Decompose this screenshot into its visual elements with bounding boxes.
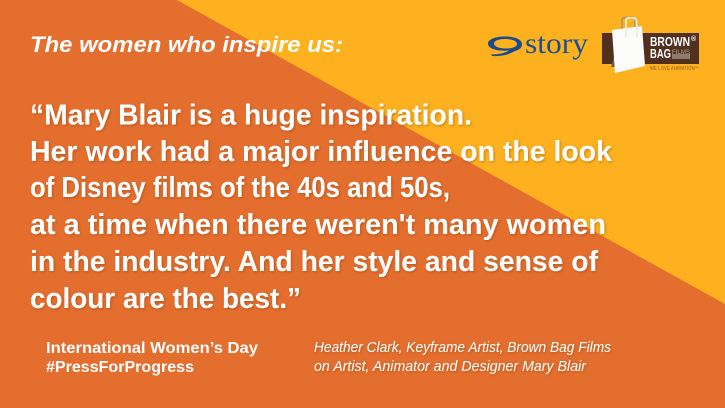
logo: Brown Bag Films: [602, 18, 699, 73]
brown band: [602, 33, 699, 64]
registered mark: ®: [691, 35, 697, 43]
brand text: BROWN: [650, 34, 690, 49]
rear handle: [622, 18, 635, 30]
icon: stylised 9: [488, 36, 522, 56]
quote: colour are the best.”: [30, 283, 301, 315]
quote: “Mary Blair is a huge inspiration.: [30, 100, 472, 132]
tagline: WE LOVE ANIMATION™: [650, 66, 699, 72]
wordmark: story: [525, 27, 588, 60]
footer: attribution: on Artist, Animator and Designer Mary Blair: [314, 359, 587, 375]
quote: [30, 100, 612, 315]
front handle: [626, 18, 637, 37]
footer: campaign: #PressForProgress: [46, 359, 194, 376]
background: yellow diagonal panel: [177, 0, 725, 304]
quote: of Disney films of the 40s and 50s,: [30, 172, 450, 204]
footer: attribution: Heather Clark, Keyframe Artist, Brown Bag Films: [314, 340, 611, 356]
footer: attribution: [314, 340, 611, 375]
footer: campaign: [46, 340, 258, 376]
quote: at a time when there weren't many women: [30, 209, 606, 241]
bag back panel: [611, 26, 645, 67]
logo: Brown Bag Films: BAG: [650, 46, 671, 61]
films tag: [672, 54, 690, 59]
heading: The women who inspire us:: [30, 32, 343, 57]
quote: Her work had a major influence on the look: [30, 136, 612, 168]
quote: in the industry. And her style and sense of: [30, 246, 599, 278]
logo: 9story: [488, 27, 588, 60]
footer: campaign: International Women’s Day: [46, 340, 258, 357]
logo: Brown Bag Films: FILMS: [672, 50, 690, 56]
bag body: [612, 26, 645, 73]
